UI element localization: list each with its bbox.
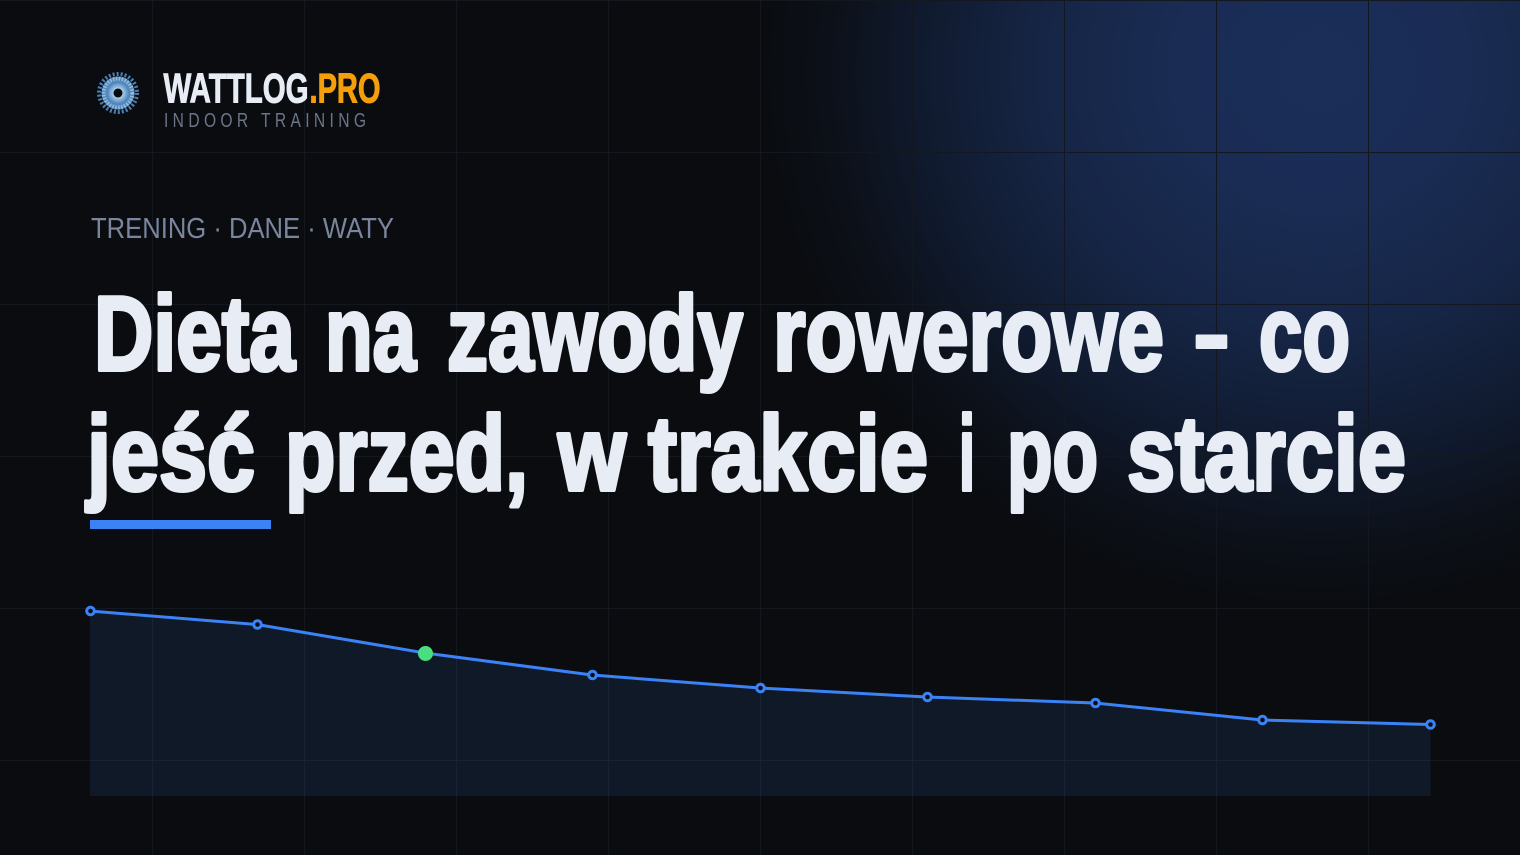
line chart <box>87 607 1434 796</box>
title <box>85 275 1406 513</box>
eyebrow text: TRENING · DANE · WATY <box>91 213 394 245</box>
title: po <box>1007 395 1098 513</box>
highlighted marker <box>418 646 433 661</box>
logo wordmark: .PRO <box>310 64 380 112</box>
logo tagline: INDOOR TRAINING <box>164 109 366 131</box>
title: – <box>1195 275 1228 393</box>
title: co <box>1259 275 1350 393</box>
title: starcie <box>1127 395 1406 513</box>
chart area fill <box>90 611 1430 796</box>
title: rowerowe <box>773 275 1164 393</box>
logo wordmark: WATTLOG <box>164 64 308 112</box>
chart line <box>90 611 1430 724</box>
title underline accent <box>90 520 271 529</box>
title: w <box>557 395 626 513</box>
title: trakcie <box>648 395 928 513</box>
title: na <box>325 275 417 393</box>
title: i <box>959 395 975 513</box>
title: jeść <box>85 395 255 513</box>
title: przed, <box>285 395 528 513</box>
chart markers <box>87 607 1434 728</box>
title: Dieta <box>94 275 296 393</box>
icon: cassette gear logo <box>99 74 137 112</box>
title: zawody <box>447 275 743 393</box>
